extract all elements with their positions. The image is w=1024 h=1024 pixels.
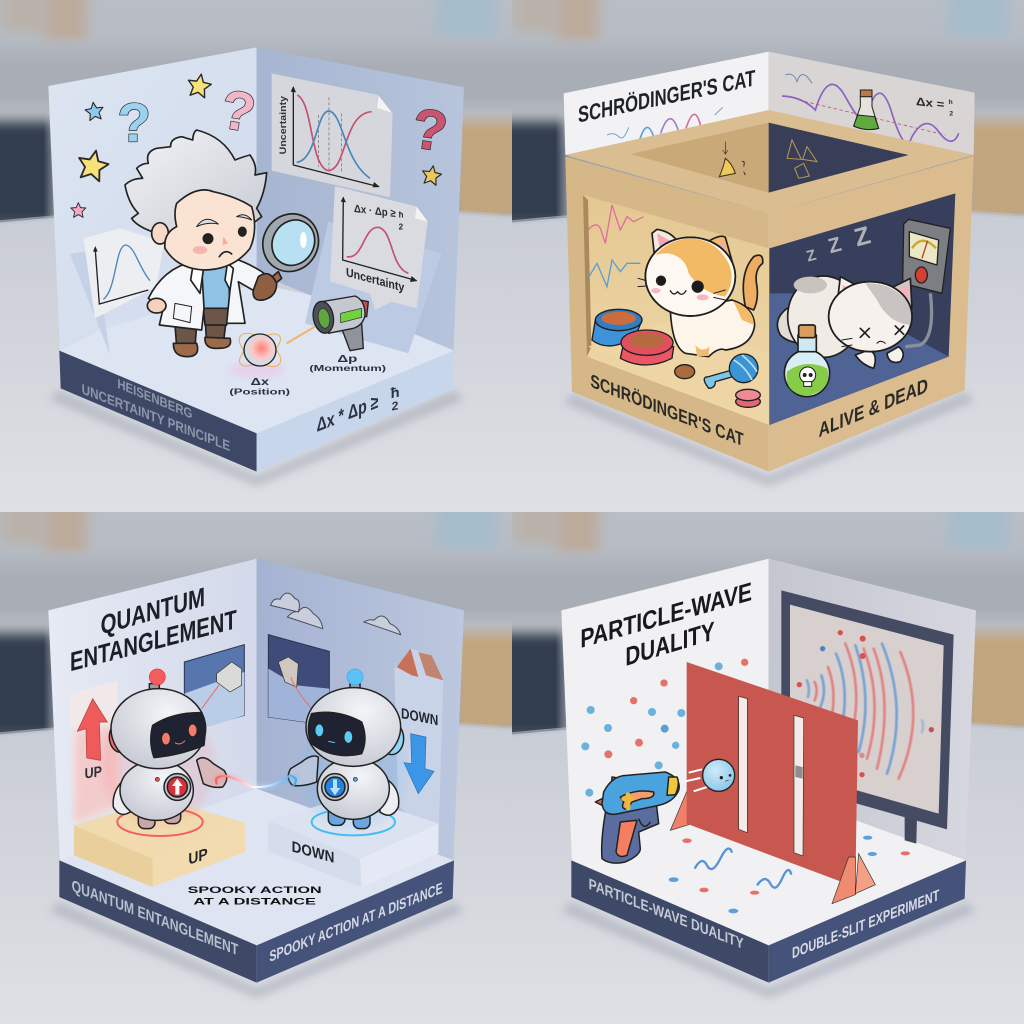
- base front-left face: [59, 351, 257, 472]
- up poster: [69, 680, 119, 824]
- icon: particle gun: [595, 772, 679, 863]
- wall picture right: [268, 635, 329, 725]
- eyes and brows: [197, 215, 252, 227]
- barrier stand left: [670, 787, 692, 830]
- base label: title: [82, 375, 230, 455]
- wall picture left: [184, 645, 244, 732]
- icon: food bowls and toys: [592, 309, 760, 407]
- left wall: [561, 559, 769, 862]
- floor: [59, 789, 454, 945]
- question marks: ?: [408, 97, 451, 164]
- title: PARTICLE-WAVE: [580, 576, 752, 654]
- base label: formula: 2: [392, 398, 399, 414]
- question marks: ?: [117, 92, 151, 154]
- left wall: [48, 559, 257, 862]
- chart: formula callout: 2: [399, 222, 404, 231]
- title: [580, 576, 752, 672]
- monitor: [781, 590, 954, 844]
- wall and floor dots: [581, 659, 910, 913]
- title: ENTANGLEMENT: [70, 603, 237, 677]
- blurred background and table: [0, 512, 512, 1024]
- caption: AT A DISTANCE: [193, 896, 316, 906]
- platform down: [268, 795, 438, 887]
- caption: [188, 885, 322, 906]
- question marks: [117, 77, 451, 164]
- paper stand: [305, 222, 442, 353]
- flap waves right and flask: 2: [949, 110, 953, 117]
- base label: formula: Δx * Δp ≥: [317, 391, 378, 437]
- base label: title: UNCERTAINTY PRINCIPLE: [82, 382, 230, 455]
- box labels: [590, 369, 928, 451]
- back flap right: [769, 52, 975, 155]
- box labels: SCHRÖDINGER'S CAT: [590, 369, 744, 451]
- chart: formula callout: [330, 186, 428, 310]
- base labels: QUANTUM ENTANGLEMENT: [72, 876, 238, 960]
- interference pattern: [807, 644, 923, 779]
- right wall: [769, 559, 976, 862]
- floor: [571, 789, 966, 945]
- chart: crossing curves: Uncertainty: [278, 95, 288, 154]
- title: DUALITY: [625, 616, 715, 672]
- blurred background and table: [0, 0, 512, 512]
- panel: Quantum entanglement: [0, 512, 512, 1024]
- barrier stand right: [832, 854, 875, 904]
- box opening: [630, 123, 769, 193]
- base front-left face: [59, 860, 257, 983]
- dead window: [769, 193, 955, 425]
- icon: gauge box: [903, 219, 950, 347]
- up poster: UP: [85, 764, 102, 783]
- flap waves right and flask: h: [949, 99, 953, 106]
- base labels: [72, 876, 443, 966]
- zzz: Z: [805, 247, 818, 266]
- labels: momentum and position: (Momentum): [309, 364, 387, 373]
- right wall: [257, 559, 464, 862]
- platform up: [74, 799, 245, 887]
- alive window: [583, 195, 769, 425]
- left wall: [48, 47, 257, 353]
- down poster: [394, 649, 443, 845]
- zzz: [805, 221, 874, 266]
- icon: particle: [228, 321, 325, 378]
- icon: alive cat: [638, 229, 763, 357]
- face: [152, 223, 168, 244]
- panel: Schrodinger's cat: [512, 0, 1024, 512]
- base label: formula: ħ: [391, 385, 400, 402]
- flap waves right and flask: [782, 74, 959, 143]
- base front-right face: [769, 860, 966, 983]
- title: QUANTUM: [101, 581, 205, 641]
- box shadow: [564, 392, 974, 487]
- clouds: [271, 593, 401, 635]
- stars: [71, 72, 443, 217]
- diorama shadow: [50, 390, 463, 487]
- double-slit barrier: [687, 662, 858, 887]
- chart: formula callout: Δx · Δp ≥: [354, 203, 396, 220]
- platform down: DOWN: [292, 839, 334, 867]
- panel: Particle-wave duality: [512, 512, 1024, 1024]
- icon: dead cat: [777, 276, 912, 368]
- slits: [739, 696, 747, 833]
- icon: particle ball: [685, 759, 735, 791]
- dead floor: [769, 293, 949, 425]
- box top: [565, 110, 974, 213]
- base labels: SPOOKY ACTION AT A DISTANCE: [269, 880, 443, 966]
- base labels: DOUBLE-SLIT EXPERIMENT: [792, 887, 940, 963]
- labels: momentum and position: [229, 354, 387, 397]
- back flap left: [564, 52, 769, 155]
- legs and shoes: [175, 317, 227, 347]
- base labels: [589, 876, 940, 963]
- caption: SPOOKY ACTION: [188, 885, 322, 895]
- icon: poison flask: [784, 325, 830, 397]
- down poster: DOWN: [401, 706, 438, 729]
- panel: Heisenberg uncertainty principle: [0, 0, 512, 512]
- icon: red robot: [102, 669, 227, 829]
- flap title: SCHRÖDINGER'S CAT: [578, 65, 755, 128]
- shirt: [197, 263, 230, 312]
- alive waves: [587, 205, 644, 287]
- magnifier: [268, 272, 282, 287]
- icon: measuring gun: [311, 296, 368, 351]
- bell and radiation sign: [719, 140, 817, 178]
- blurred background and table: [512, 512, 1024, 1024]
- base front-left face: [571, 860, 769, 983]
- diorama shadow: [562, 902, 975, 999]
- screen dots: [797, 630, 934, 777]
- box front-left face: [565, 157, 769, 472]
- zzz: Z: [851, 221, 874, 252]
- right wall: [257, 47, 464, 353]
- box labels: ALIVE & DEAD: [819, 374, 928, 442]
- icon: blue robot: [288, 669, 407, 829]
- zzz: Z: [826, 233, 844, 258]
- base front-right face: [257, 860, 454, 983]
- floor: [60, 283, 454, 433]
- lab coat: [148, 262, 204, 330]
- alive floor shade: [588, 322, 769, 425]
- base label: title: HEISENBERG: [117, 375, 192, 422]
- base front-right face: [257, 351, 454, 472]
- platform up: UP: [188, 845, 208, 869]
- blurred background and table: [512, 0, 1024, 512]
- diorama shadow: [50, 902, 463, 999]
- hair: [125, 130, 267, 233]
- chart: left bell curve: [70, 228, 164, 355]
- labels: momentum and position: Δp: [337, 354, 357, 365]
- labels: momentum and position: Δx: [251, 377, 270, 388]
- question marks: ?: [216, 77, 260, 144]
- base labels: PARTICLE-WAVE DUALITY: [589, 876, 744, 953]
- labels: momentum and position: (Position): [229, 388, 291, 397]
- chart: formula callout: Uncertainty: [346, 265, 404, 295]
- flap waves left: [607, 107, 723, 143]
- left hand: [147, 298, 166, 313]
- box front-right face: [769, 156, 974, 472]
- flap waves right and flask: Δx =: [916, 96, 945, 111]
- chart: crossing curves: [272, 73, 393, 197]
- icon: scientist: [125, 130, 329, 357]
- entanglement wire: [216, 775, 296, 787]
- chart: formula callout: ħ: [399, 210, 404, 219]
